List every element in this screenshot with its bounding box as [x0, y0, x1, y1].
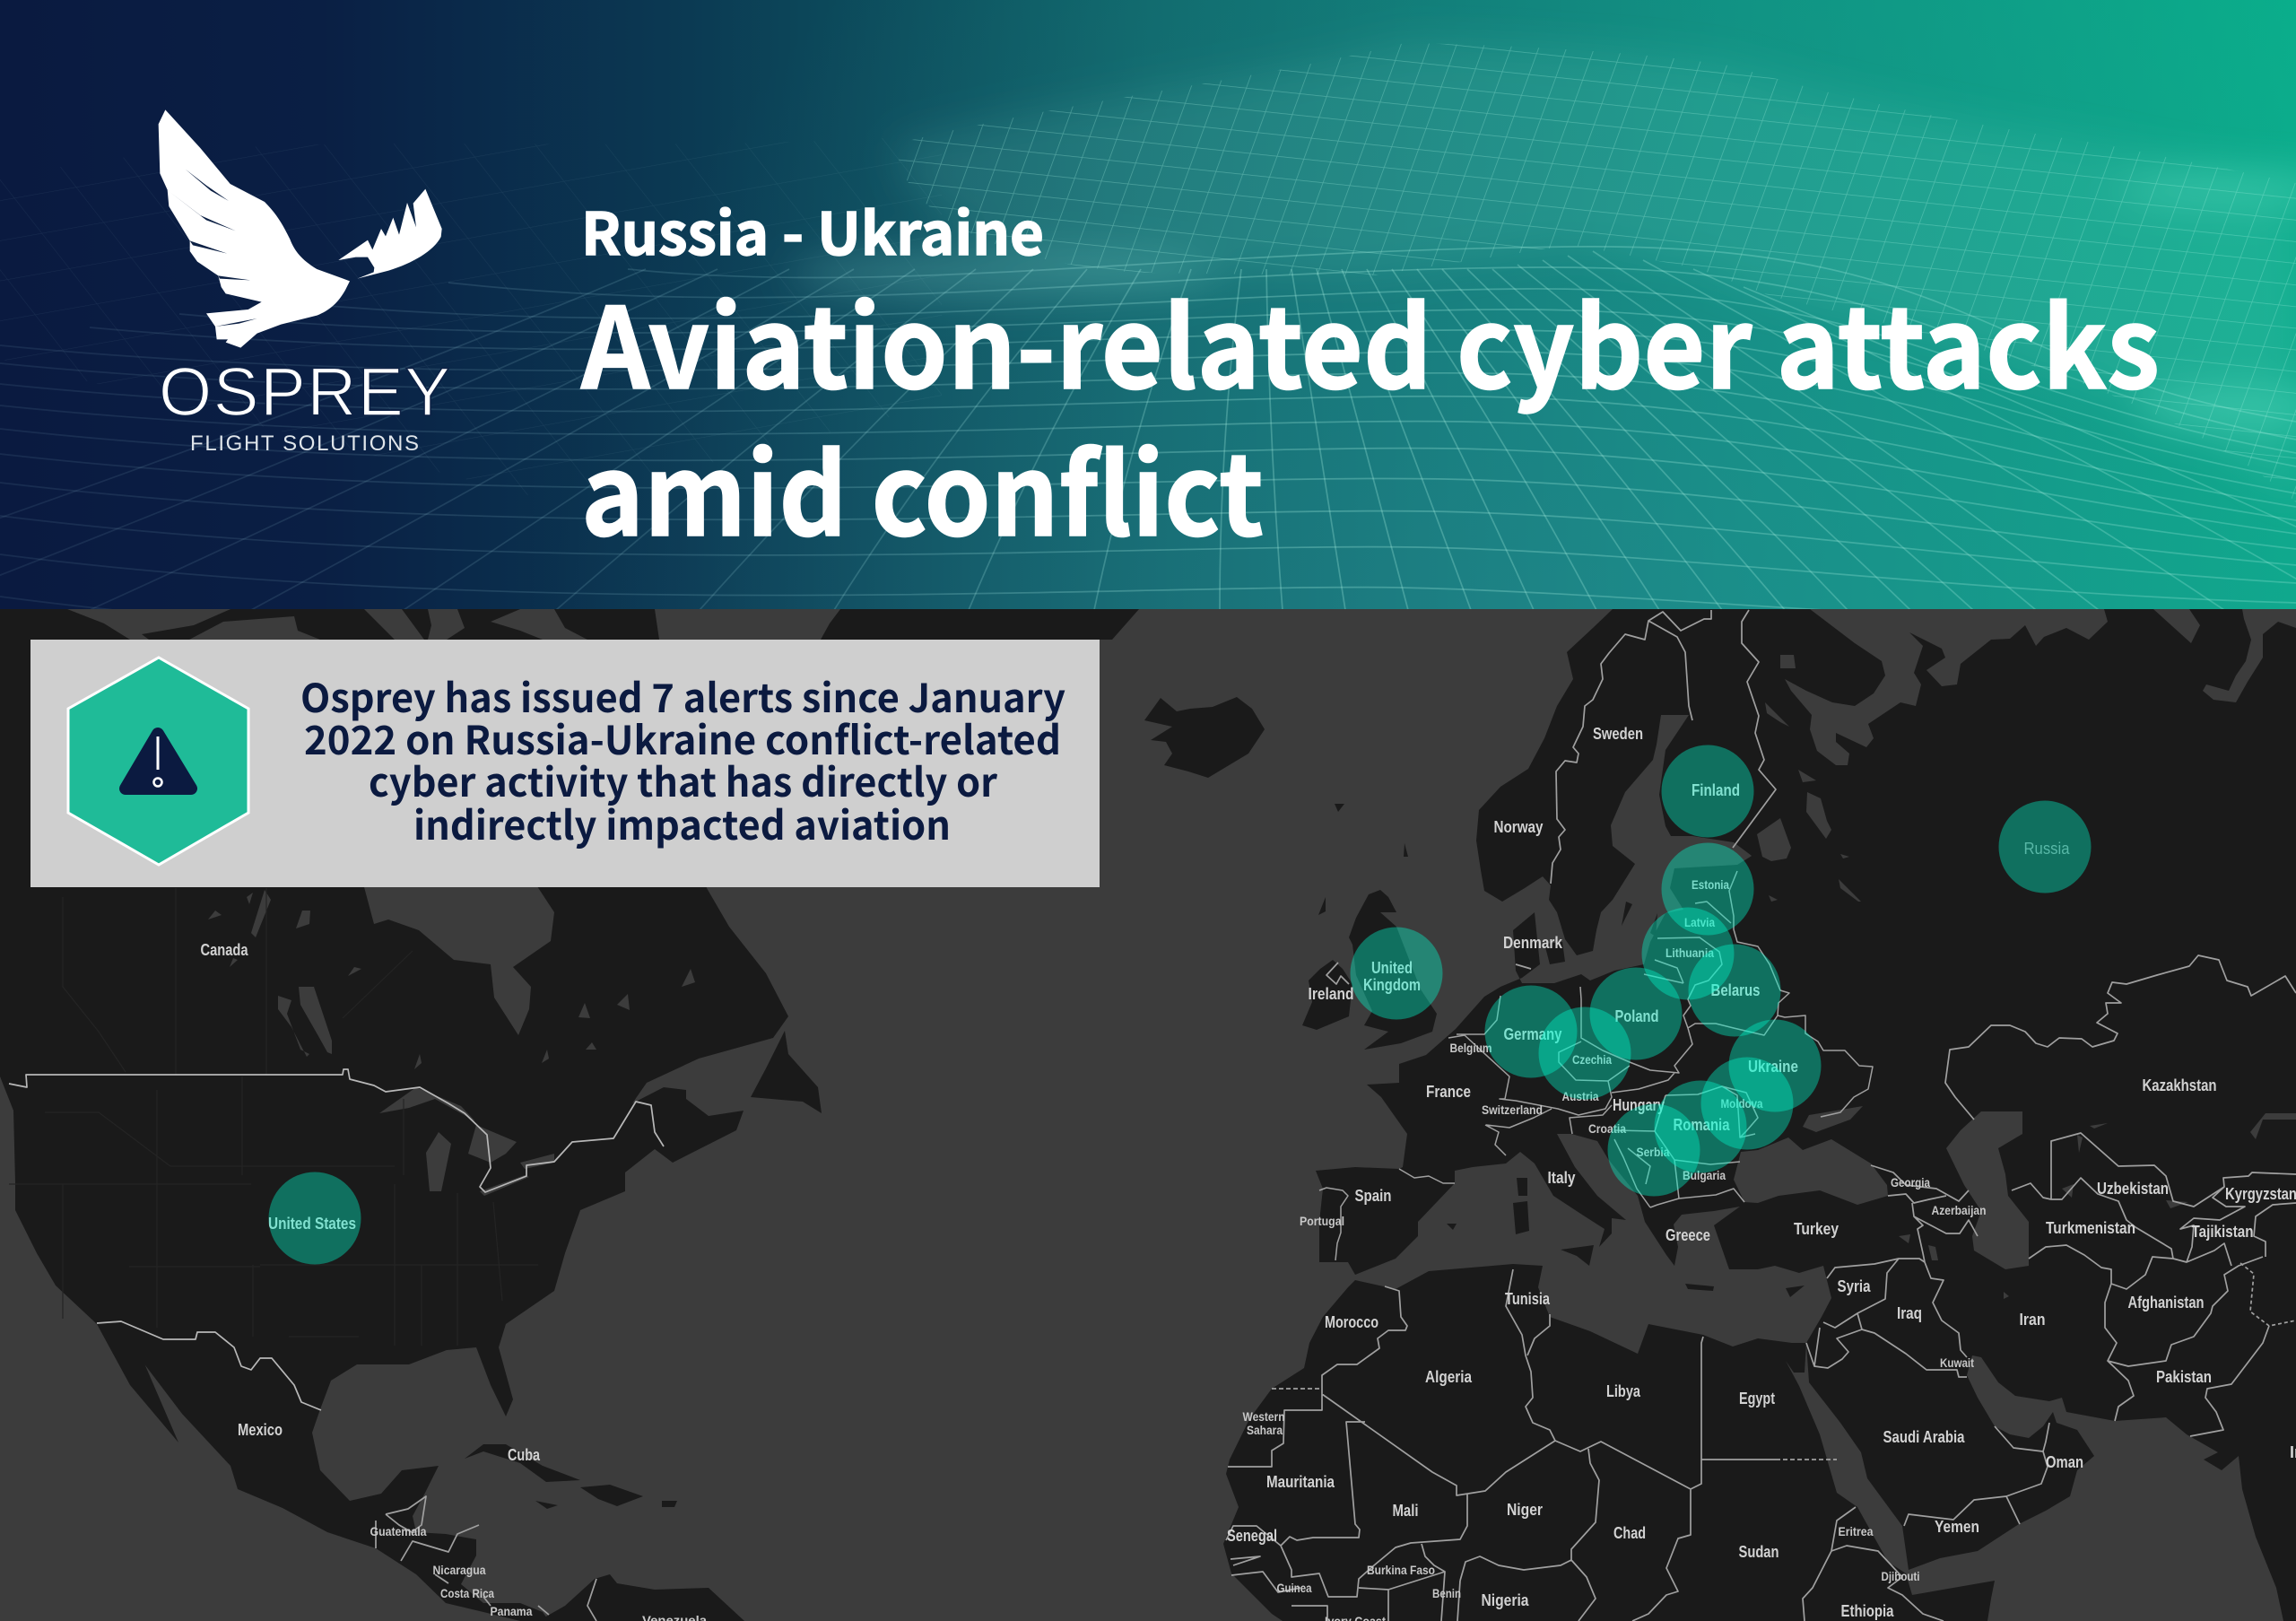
circle: Germany: [1485, 985, 1577, 1078]
country labels: Portugal: [1300, 1214, 1344, 1228]
country labels: Georgia: [1891, 1175, 1930, 1190]
country labels: Hungary: [1613, 1096, 1665, 1114]
circle: Finland: [1661, 745, 1754, 838]
icon: hexagon alert: [68, 658, 248, 865]
land masses: [0, 609, 2296, 1621]
country labels: Russia: [2023, 840, 2070, 858]
country labels: Bulgaria: [1683, 1168, 1726, 1182]
subtitle: Russia - Ukraine: [581, 187, 1044, 272]
Lakes of Russia: [1757, 655, 1861, 902]
country labels: Estonia: [1692, 877, 1729, 892]
logo: Osprey Flight Solutions: [159, 109, 450, 456]
country labels: Mauritania: [1266, 1473, 1335, 1491]
Caribbean islands: [465, 1444, 677, 1509]
country labels: Iraq: [1897, 1304, 1922, 1322]
title: Aviation-related cyber attacks: [580, 258, 2160, 421]
country labels: Benin: [1432, 1586, 1461, 1600]
country labels: Tajikistan: [2192, 1223, 2253, 1241]
Iceland: [1144, 697, 1265, 778]
Mediterranean islands: [1447, 1178, 1805, 1297]
Central Asian lakes: [1899, 1113, 2296, 1299]
country labels: Moldova: [1720, 1096, 1763, 1111]
country labels: Kuwait: [1940, 1355, 1974, 1370]
icon: osprey bird: [159, 109, 442, 348]
country labels: Romania: [1674, 1116, 1730, 1134]
country labels: Finland: [1692, 781, 1740, 799]
logo tagline: FLIGHT SOLUTIONS: [190, 431, 419, 456]
Black Sea: [1734, 1137, 1888, 1205]
country labels: Guinea: [1277, 1581, 1312, 1595]
Eurasia: [1316, 609, 2296, 1621]
callout text: indirectly impacted aviation: [413, 794, 951, 851]
country labels: Greece: [1665, 1226, 1710, 1244]
country labels: Canada: [201, 941, 248, 959]
circle: Poland: [1589, 967, 1683, 1060]
Ireland: [1302, 960, 1352, 1030]
country labels: Belgium: [1449, 1041, 1492, 1055]
country labels: Kingdom: [1363, 976, 1421, 994]
circle: Serbia: [1607, 1103, 1700, 1197]
alert location circles: [269, 745, 2092, 1265]
country labels: Senegal: [1227, 1527, 1277, 1545]
country labels: Ukraine: [1748, 1058, 1798, 1076]
wave light bands: [789, 43, 2296, 502]
Greenland: [821, 609, 1139, 640]
Sea of Azov: [1803, 1106, 1863, 1132]
callout text: 2022 on Russia-Ukraine conflict-related: [304, 709, 1061, 766]
circle: United States: [269, 1172, 361, 1265]
country labels: Czechia: [1572, 1052, 1612, 1067]
country labels: Western: [1243, 1409, 1284, 1424]
country labels: Panama: [490, 1604, 533, 1618]
header banner: [0, 0, 2296, 658]
circle: Lithuania: [1641, 908, 1735, 999]
callout text: cyber activity that has directly or: [369, 751, 998, 808]
country labels: Turkmenistan: [2046, 1219, 2135, 1237]
circle: United Kingdom: [1351, 928, 1442, 1019]
country labels: Uzbekistan: [2097, 1180, 2169, 1198]
circle: Belarus: [1688, 944, 1781, 1037]
country labels: Afghanistan: [2127, 1294, 2205, 1312]
country labels: Morocco: [1325, 1313, 1378, 1331]
Scandinavia: [1516, 610, 1776, 969]
South America: [538, 1574, 744, 1621]
Africa: [1223, 1264, 1995, 1621]
country labels: Italy: [1548, 1169, 1575, 1187]
country labels: Mali: [1392, 1502, 1419, 1520]
title: amid conflict: [581, 405, 1264, 568]
circle: Ukraine: [1729, 1019, 1821, 1112]
country labels: Norway: [1494, 818, 1543, 836]
circle: Czechia: [1539, 1007, 1631, 1100]
circle: Romania: [1654, 1080, 1747, 1173]
Ireland: [1326, 963, 1349, 984]
country labels: Switzerland: [1482, 1102, 1543, 1117]
country labels: Sudan: [1738, 1543, 1779, 1561]
Caucasus and Middle East: [1806, 1165, 2049, 1526]
White Sea and Barents Sea: [1785, 609, 2108, 765]
country labels: France: [1426, 1083, 1471, 1101]
country labels: Oman: [2046, 1453, 2083, 1471]
country labels: Azerbaijan: [1932, 1203, 1986, 1217]
country labels: Belarus: [1711, 981, 1760, 999]
callout text: [300, 667, 1065, 851]
country labels: Saudi Arabia: [1883, 1428, 1965, 1446]
country labels: United States: [268, 1215, 356, 1233]
callout: alerts issued: [30, 640, 1100, 887]
title: [580, 258, 2160, 568]
circle: Moldova: [1700, 1057, 1794, 1150]
country labels: [201, 725, 2296, 1621]
country labels: Niger: [1507, 1501, 1543, 1519]
country labels: Austria: [1562, 1089, 1599, 1103]
country labels: Serbia: [1636, 1145, 1670, 1159]
Africa: [1226, 1269, 1944, 1621]
country labels: Ireland: [1308, 985, 1354, 1003]
country labels: Djibouti: [1882, 1569, 1919, 1583]
country labels: Algeria: [1425, 1368, 1473, 1386]
country labels: Kazakhstan: [2142, 1076, 2217, 1094]
Great Lakes and inland lakes: [208, 890, 695, 1196]
upper wave mesh: [897, 43, 2296, 502]
country labels: Yemen: [1935, 1518, 1979, 1536]
North America: [0, 609, 788, 1621]
country labels: United: [1371, 959, 1413, 977]
Central Asia: [2012, 1133, 2296, 1436]
country labels: Egypt: [1739, 1390, 1775, 1407]
Caspian Sea: [1946, 1111, 2029, 1269]
country labels: Poland: [1614, 1007, 1659, 1025]
US borders: [9, 1069, 664, 1410]
country labels: Nigeria: [1482, 1591, 1529, 1609]
country labels: Syria: [1837, 1277, 1871, 1295]
country labels: Pakistan: [2156, 1368, 2212, 1386]
country labels: Latvia: [1684, 915, 1715, 929]
circle: Russia: [1998, 800, 2092, 893]
far mesh: [0, 135, 942, 502]
country labels: Eritrea: [1839, 1524, 1874, 1538]
country labels: Croatia: [1588, 1121, 1626, 1136]
country labels: Iran: [2020, 1311, 2045, 1329]
country labels: Chad: [1613, 1524, 1646, 1542]
country labels: Ethiopia: [1840, 1602, 1894, 1620]
circle: Estonia: [1661, 843, 1754, 935]
country labels: Tunisia: [1505, 1290, 1551, 1308]
country labels: Denmark: [1503, 934, 1563, 952]
Arctic water gaps: [67, 609, 840, 640]
Central America: [376, 1496, 596, 1621]
country labels: Turkey: [1794, 1220, 1839, 1238]
small northern islands: [1318, 804, 1657, 964]
country labels: Libya: [1606, 1382, 1641, 1400]
country labels: Costa Rica: [440, 1586, 494, 1600]
country labels: Nicaragua: [432, 1563, 486, 1577]
country labels: Burkina Faso: [1367, 1563, 1435, 1577]
country labels: Germany: [1503, 1025, 1562, 1043]
country borders: [9, 610, 2296, 1621]
lower wave mesh lines: [0, 246, 2296, 609]
country labels: Guatemala: [370, 1524, 427, 1538]
logo wordmark: OSPREY: [159, 354, 450, 431]
callout text: Osprey has issued 7 alerts since January: [300, 667, 1065, 724]
Newfoundland: [751, 1031, 822, 1113]
country labels: Sahara: [1247, 1423, 1283, 1437]
country labels: Sweden: [1593, 725, 1643, 743]
Russia Kazakhstan: [1945, 955, 2296, 1120]
faint state and province borders: [9, 888, 538, 1346]
Baltic side of Finland: [1734, 842, 1752, 865]
Great Britain: [1349, 890, 1437, 1050]
country labels: Mexico: [238, 1421, 283, 1439]
country labels: Spain: [1354, 1187, 1392, 1205]
Central and eastern Europe: [1319, 871, 1873, 1260]
country labels: Lithuania: [1665, 946, 1714, 960]
map background: [0, 609, 2296, 1621]
country labels: Cuba: [508, 1446, 541, 1464]
Hudson Bay: [363, 884, 554, 1035]
